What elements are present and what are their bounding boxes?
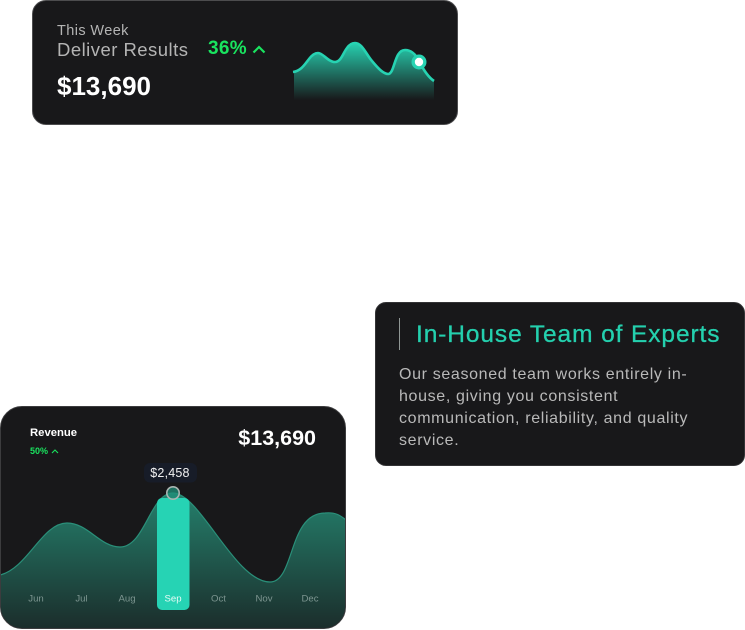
icon: small up chevron: [52, 449, 58, 454]
text block: description: Our seasoned team works entirely in-: [399, 366, 687, 383]
metric: 36 percent up: 36%: [208, 38, 247, 59]
axis labels: months: Oct: [211, 594, 226, 604]
panel: revenue card: [0, 406, 346, 629]
text block: description: house, giving you consistent: [399, 388, 618, 405]
metric: revenue total: $13,690: [238, 426, 316, 450]
tooltip: september value: $2,458: [150, 466, 190, 480]
heading: deliver results: Deliver Results: [57, 39, 188, 60]
label: this week: This Week: [57, 23, 129, 39]
metric: total amount: $13,690: [57, 71, 151, 101]
chart: weekly area sparkline: [292, 42, 435, 98]
axis labels: months: Aug: [118, 594, 136, 604]
axis labels: months: [28, 594, 319, 604]
highlighted bar: september: [157, 498, 190, 610]
axis labels: months: Sep: [164, 594, 182, 604]
axis labels: months: Dec: [301, 594, 319, 604]
tooltip: september value: [144, 463, 197, 482]
icon: up chevron: [252, 46, 266, 54]
metric: 50 percent up: 50%: [30, 446, 48, 456]
icon: chart marker: [412, 54, 426, 70]
text block: description: service.: [399, 432, 459, 449]
heading: in-house team of experts: In-House Team of Experts: [416, 321, 720, 348]
axis labels: months: Nov: [255, 594, 273, 604]
label: revenue: Revenue: [30, 427, 77, 439]
icon: peak marker: [167, 487, 179, 499]
panel: this week card: [32, 0, 458, 125]
text block: description: [399, 366, 688, 449]
panel: in-house team card: [375, 302, 745, 466]
text block: description: communication, reliability, and quality: [399, 410, 688, 427]
axis labels: months: Jun: [28, 594, 44, 604]
chart: revenue area chart: [1, 463, 345, 628]
axis labels: months: Jul: [75, 594, 88, 604]
divider accent: [399, 318, 400, 350]
